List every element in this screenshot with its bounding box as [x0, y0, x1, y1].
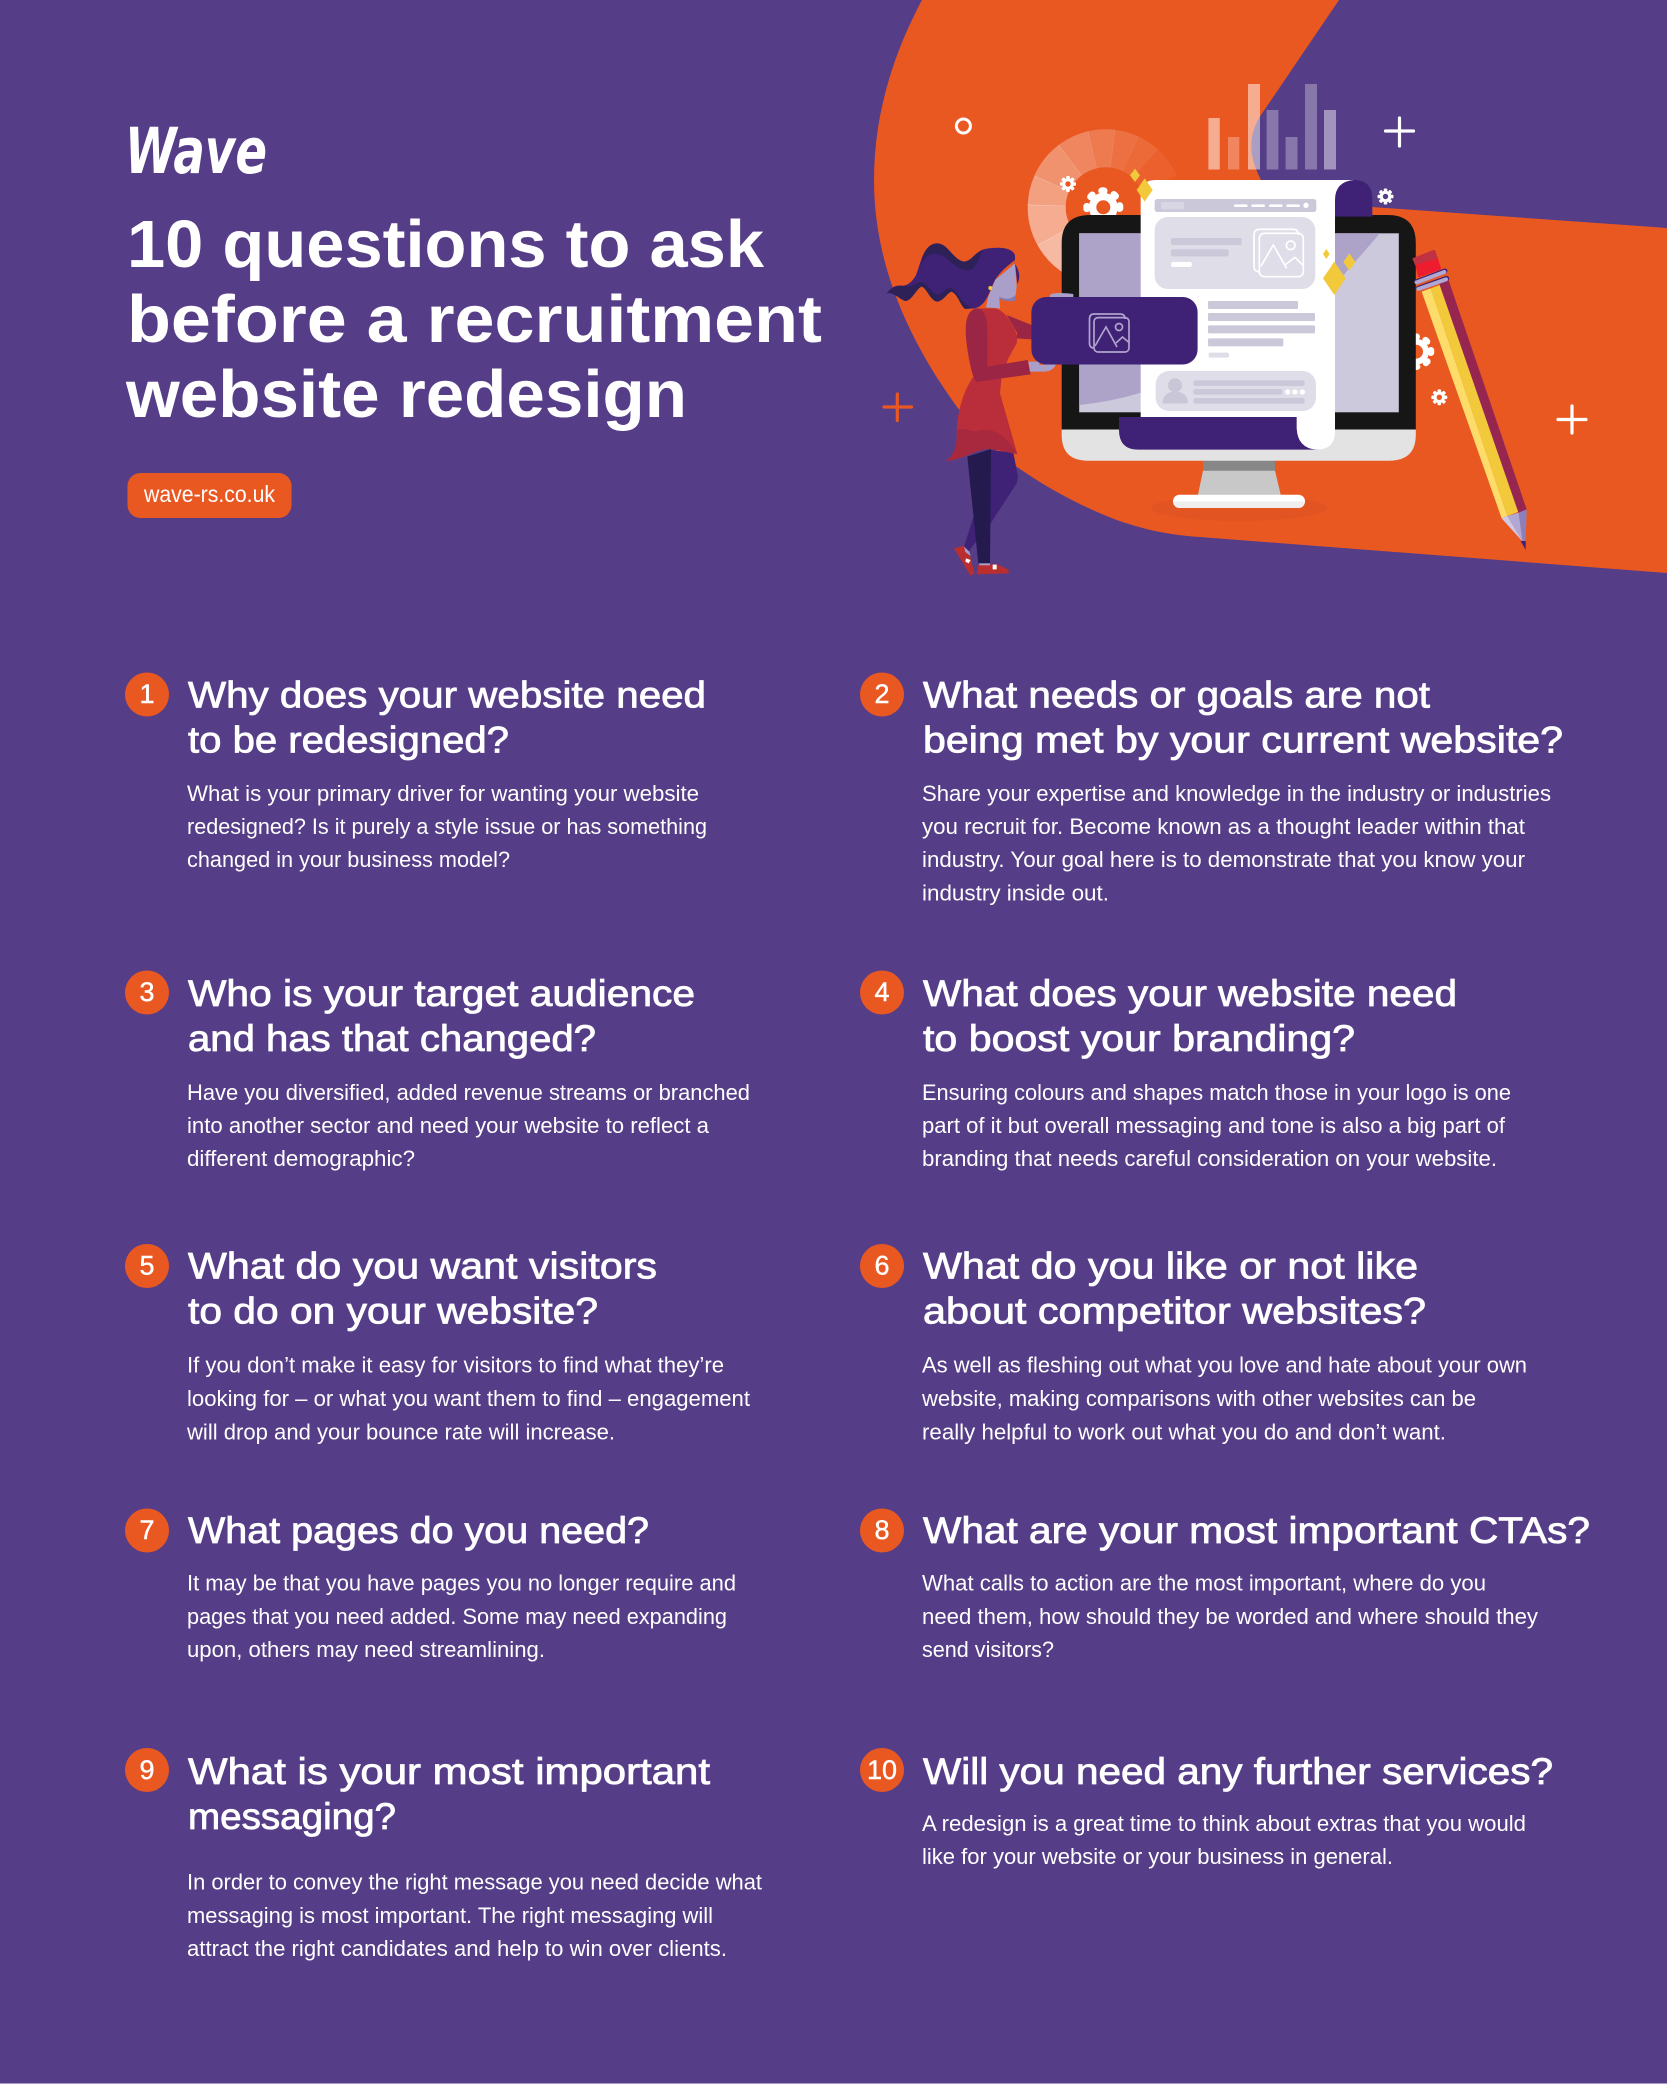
number badge 3: 3: [139, 977, 155, 1007]
question 8: [860, 1508, 1590, 1662]
number badge 9: [125, 1748, 169, 1792]
body 9: [187, 1869, 762, 1961]
icon: gear behind monitor: [1401, 337, 1431, 367]
number badge 7: [125, 1508, 169, 1552]
back leg: [964, 450, 1018, 552]
bar chart: [1208, 84, 1336, 170]
body 6: As well as fleshing out what you love and hate about your own: [922, 1352, 1527, 1377]
heading 6: [923, 1245, 1426, 1331]
question 10: [860, 1748, 1553, 1869]
body 9: messaging is most important. The right messaging will: [187, 1903, 713, 1928]
body 8: What calls to action are the most important, where do you: [922, 1570, 1486, 1595]
icon: large gear: [1087, 191, 1120, 224]
number badge 7: 7: [139, 1515, 155, 1545]
body 6: website, making comparisons with other websites can be: [921, 1386, 1476, 1411]
text lines: [1208, 301, 1315, 358]
heading 9: What is your most important: [188, 1751, 711, 1792]
heading 2: What needs or goals are not: [923, 674, 1431, 716]
website button: [128, 473, 292, 518]
heading 5: What do you want visitors: [188, 1245, 657, 1286]
body 3: [187, 1080, 750, 1171]
body 6: really helpful to work out what you do and don’t want.: [922, 1419, 1446, 1444]
body 3: different demographic?: [187, 1146, 415, 1171]
number badge 1: [125, 672, 169, 716]
title: website redesign: [125, 357, 687, 432]
question 9: [125, 1748, 762, 1961]
body 10: A redesign is a great time to think about extras that you would: [922, 1811, 1526, 1836]
number badge 10: 10: [867, 1755, 897, 1785]
body 1: changed in your business model?: [187, 847, 510, 872]
question 7: [125, 1508, 736, 1662]
heading 3: Who is your target audience: [188, 973, 695, 1014]
question 4: [860, 970, 1511, 1171]
heading 4: to boost your branding?: [923, 1018, 1355, 1059]
heading 3: [188, 973, 695, 1059]
page curl: [1335, 180, 1372, 217]
heading 4: [923, 973, 1457, 1059]
icon: small gear top right: [1379, 190, 1392, 203]
heading 6: What do you like or not like: [923, 1245, 1418, 1286]
body 2: [922, 781, 1551, 906]
heading 2: [923, 674, 1563, 760]
body 8: send visitors?: [922, 1637, 1054, 1662]
body 6: [921, 1352, 1527, 1444]
number badge 2: [860, 672, 904, 716]
title: 10 questions to ask: [127, 207, 765, 282]
heading 6: about competitor websites?: [923, 1290, 1426, 1331]
woman holding card: [887, 243, 1073, 576]
body 9: In order to convey the right message you need decide what: [187, 1869, 762, 1894]
number badge 4: 4: [874, 977, 890, 1007]
upper hand: [1050, 293, 1073, 298]
body 5: If you don’t make it easy for visitors to find what they’re: [187, 1352, 724, 1377]
heading 10: Will you need any further services?: [923, 1751, 1553, 1792]
pencil: [1412, 250, 1527, 550]
body 10: like for your website or your business in general.: [922, 1844, 1393, 1869]
heading 9: [188, 1751, 711, 1837]
heading 5: to do on your website?: [188, 1290, 598, 1331]
heading 2: being met by your current website?: [923, 720, 1563, 760]
title: before a recruitment: [127, 282, 822, 357]
number badge 1: 1: [139, 679, 155, 709]
body 3: into another sector and need your website to reflect a: [187, 1113, 710, 1138]
body 7: upon, others may need streamlining.: [187, 1637, 545, 1662]
heading 4: What does your website need: [923, 973, 1457, 1014]
body 8: need them, how should they be worded and where should they: [922, 1604, 1538, 1629]
heading 8: What are your most important CTAs?: [923, 1510, 1590, 1551]
heading 1: to be redesigned?: [188, 720, 509, 760]
question 3: [125, 970, 750, 1171]
illustration: website redesign: [884, 84, 1586, 576]
number badge 10: [860, 1748, 904, 1792]
body 9: attract the right candidates and help to win over clients.: [187, 1936, 727, 1961]
icon: small gear lower right: [1433, 391, 1446, 404]
page header bar: [1155, 199, 1316, 212]
number badge 3: [125, 970, 169, 1014]
body 5: [186, 1352, 750, 1444]
hair: [887, 243, 1015, 309]
icon: ring: [956, 119, 970, 133]
monitor: [1062, 215, 1416, 521]
sparkles: [1130, 169, 1355, 295]
far arm: [1007, 315, 1032, 339]
body 2: Share your expertise and knowledge in the industry or industries: [922, 781, 1551, 806]
question 6: [860, 1244, 1527, 1444]
number badge 5: [125, 1244, 169, 1288]
hero card: [1155, 217, 1315, 289]
number badge 6: [860, 1244, 904, 1288]
number badge 8: 8: [874, 1515, 890, 1545]
body 4: [922, 1080, 1511, 1171]
orange wave shape: [874, 0, 1667, 573]
body 7: pages that you need added. Some may need expanding: [187, 1604, 727, 1629]
number badge 8: [860, 1508, 904, 1552]
icon: orange plus: [884, 394, 912, 420]
body 2: industry. Your goal here is to demonstrate that you know your: [922, 847, 1525, 872]
body 3: Have you diversified, added revenue streams or branched: [187, 1080, 750, 1105]
logo: Wave: [125, 115, 267, 188]
body 1: [187, 781, 707, 872]
body 7: It may be that you have pages you no longer require and: [187, 1570, 736, 1595]
body 2: industry inside out.: [922, 880, 1109, 906]
radial fan: [1022, 124, 1189, 291]
number badge 6: 6: [874, 1250, 890, 1280]
icon: image outline: [1090, 314, 1129, 352]
lower hand: [1028, 357, 1056, 372]
neck and face: [986, 263, 1017, 308]
heading 1: Why does your website need: [188, 674, 706, 716]
front leg: [967, 449, 991, 563]
title: [125, 207, 822, 432]
number badge 5: 5: [139, 1250, 155, 1280]
body 4: branding that needs careful consideration on your website.: [922, 1146, 1497, 1171]
question 2: [860, 672, 1563, 906]
heading 9: messaging?: [188, 1796, 396, 1837]
sleeve: [966, 308, 1031, 382]
question 1: [125, 672, 707, 872]
icon: plus top right: [1386, 118, 1414, 146]
body 10: [922, 1811, 1526, 1869]
body 4: part of it but overall messaging and tone is also a big part of: [922, 1113, 1506, 1138]
heading 1: [188, 674, 706, 760]
heading 3: and has that changed?: [188, 1018, 596, 1059]
icon: image: [1254, 229, 1303, 277]
profile card: [1156, 371, 1316, 411]
number badge 4: [860, 970, 904, 1014]
body 8: [922, 1570, 1538, 1662]
body 1: redesigned? Is it purely a style issue or has something: [187, 814, 707, 839]
heading 5: [188, 1245, 657, 1331]
body 5: will drop and your bounce rate will increase.: [186, 1419, 615, 1444]
document page: [1119, 169, 1372, 450]
body 4: Ensuring colours and shapes match those in your logo is one: [922, 1080, 1511, 1105]
dress: [946, 308, 1017, 461]
question 5: [125, 1244, 750, 1444]
number badge 9: 9: [139, 1755, 155, 1785]
body 5: looking for – or what you want them to find – engagement: [187, 1386, 750, 1411]
shoes: [954, 546, 1009, 576]
purple image card: [1031, 297, 1198, 364]
paper: [1141, 180, 1354, 450]
body 7: [187, 1570, 736, 1662]
icon: plus lower right: [1558, 406, 1586, 433]
body 2: you recruit for. Become known as a thought leader within that: [922, 814, 1525, 839]
number badge 2: 2: [874, 679, 890, 709]
heading 7: What pages do you need?: [188, 1510, 649, 1551]
body 1: What is your primary driver for wanting your website: [187, 781, 699, 806]
icon: small gear left: [1061, 177, 1075, 191]
website button: wave-rs.co.uk: [143, 481, 275, 507]
